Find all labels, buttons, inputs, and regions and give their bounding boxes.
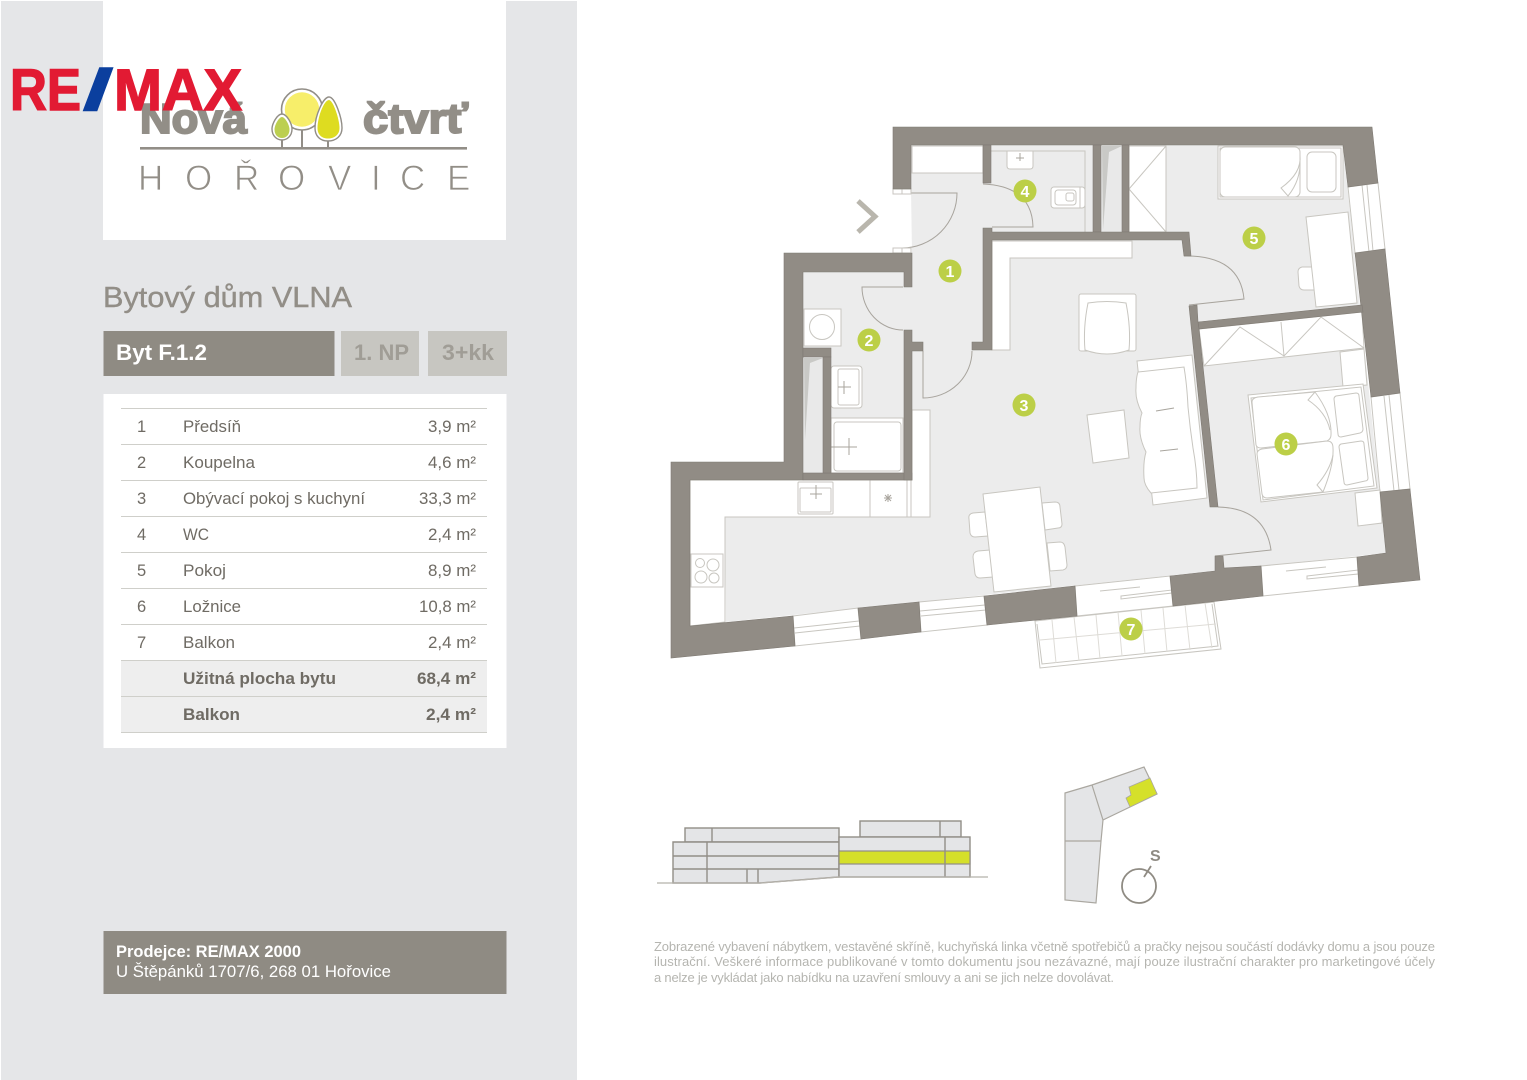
heading: building name: Bytový dům VLNA	[103, 282, 353, 314]
marker 4	[1014, 180, 1036, 202]
armchair	[1079, 294, 1136, 354]
row 4: WC	[183, 526, 209, 544]
building elevation	[657, 821, 988, 883]
marker 1: 1	[946, 264, 955, 281]
living room furniture	[969, 294, 1207, 592]
row: usable area total: Užitná plocha bytu	[183, 670, 336, 688]
icon: washbasin	[831, 366, 862, 408]
badge: floor: 1. NP	[354, 340, 409, 365]
room markers	[858, 180, 1298, 640]
badge: unit name	[104, 331, 334, 376]
dining table	[983, 487, 1051, 592]
badge: unit name: Byt F.1.2	[116, 340, 207, 365]
RE/MAX logo	[10, 58, 242, 123]
shafts	[803, 145, 1122, 473]
row 1: 3,9 m²	[428, 418, 477, 436]
row 5	[137, 562, 477, 580]
kitchen fixtures	[691, 482, 892, 587]
arrow: entrance	[858, 201, 875, 232]
highlighted unit	[1126, 778, 1157, 807]
icon: compass: S	[1150, 848, 1161, 865]
row 7: 2,4 m²	[428, 634, 477, 652]
floor plan	[671, 127, 1420, 668]
row 3: 33,3 m²	[419, 490, 477, 508]
badge: floor	[341, 331, 419, 376]
row 7: Balkon	[183, 634, 235, 652]
row: balcony total: 2,4 m²	[426, 706, 477, 724]
RE/MAX logo: MAX	[114, 58, 242, 123]
marker 6: 6	[1282, 437, 1291, 454]
row 7: 7	[137, 634, 146, 652]
row 1: 1	[137, 418, 146, 436]
desk chair	[1298, 267, 1315, 290]
row 5: 5	[137, 562, 146, 580]
marker 7: 7	[1127, 622, 1136, 639]
row 2: 4,6 m²	[428, 454, 477, 472]
highlighted floor	[839, 851, 970, 864]
marker 3	[1012, 394, 1036, 416]
panel: seller contact: Prodejce: RE/MAX 2000	[116, 943, 301, 961]
icon: bathtub	[831, 418, 903, 473]
balcony	[1035, 602, 1221, 668]
marker 7	[1120, 618, 1142, 640]
logo wordmark: Hořovice: HOŘOVICE	[138, 159, 470, 198]
marker 5	[1242, 226, 1266, 250]
sofa	[1136, 355, 1207, 505]
row 4: 4	[137, 526, 146, 544]
row 2: Koupelna	[183, 454, 256, 472]
badge: layout	[428, 331, 507, 376]
row 3: 3	[137, 490, 146, 508]
logo wordmark: čtvrť: čtvrť	[363, 95, 469, 142]
row 3	[137, 490, 477, 508]
panel: seller contact	[104, 931, 506, 994]
bedroom 6 furniture	[1248, 384, 1382, 526]
bathroom fixtures	[804, 309, 903, 473]
row: balcony total: Balkon	[183, 706, 240, 724]
doors	[862, 184, 1271, 556]
row 6: 6	[137, 598, 146, 616]
icon: hob	[691, 554, 723, 587]
icon: toilet	[1051, 187, 1085, 208]
bedroom 5 furniture	[1218, 146, 1357, 307]
row 4	[137, 526, 477, 544]
panel: project logo	[103, 0, 506, 240]
room floors	[725, 145, 1386, 622]
RE/MAX logo: /	[82, 58, 114, 123]
coffee table	[1087, 410, 1129, 463]
row 1: Předsíň	[183, 418, 241, 436]
badge: layout: 3+kk	[442, 340, 495, 365]
site plan	[1065, 767, 1161, 903]
marker 2	[858, 328, 880, 352]
marker 2: 2	[865, 333, 874, 350]
disclaimer	[654, 939, 1436, 985]
dining chairs	[969, 502, 1067, 578]
row 6: 10,8 m²	[419, 598, 477, 616]
row: usable area total: 68,4 m²	[417, 670, 477, 688]
icon: kitchen sink	[798, 482, 833, 514]
walls	[671, 127, 1420, 658]
panel: left sidebar	[1, 0, 577, 1080]
windows and balcony door	[793, 183, 1410, 646]
marker 6	[1274, 432, 1298, 456]
disclaimer: Zobrazené vybavení nábytkem, vestavěné skříně, kuchyňská linka včetně spotřebičů a pračky nejsou součástí dodávky domu a jsou pouze	[654, 939, 1435, 954]
double bed	[1248, 384, 1377, 502]
marker 3: 3	[1020, 398, 1029, 415]
row: balcony total	[183, 706, 477, 724]
table: room areas	[104, 394, 506, 748]
icon: extractor	[884, 494, 892, 502]
logo rule	[140, 147, 467, 150]
row 3: Obývací pokoj s kuchyní	[183, 490, 365, 508]
row 5: 8,9 m²	[428, 562, 477, 580]
row: usable area total	[183, 670, 477, 688]
RE/MAX logo: RE	[10, 58, 81, 123]
marker 4: 4	[1021, 184, 1030, 201]
row 7	[137, 634, 477, 652]
icon: three trees	[272, 89, 342, 148]
desk	[1306, 212, 1357, 307]
single bed	[1218, 146, 1343, 199]
row 4: 2,4 m²	[428, 526, 477, 544]
panel: seller contact: U Štěpánků 1707/6, 268 01 Hořovice	[116, 962, 391, 981]
row 6	[137, 598, 477, 616]
disclaimer: a nelze je vykládat jako nabídku na uzavření smlouvy a ani se jich nelze dovolávat.	[654, 970, 1114, 985]
marker 5: 5	[1250, 231, 1259, 248]
row 5: Pokoj	[183, 562, 226, 580]
logo wordmark: Nová: Nová	[140, 95, 248, 142]
icon: WC sink	[1007, 151, 1033, 169]
icon: washing machine	[804, 309, 841, 346]
row 1	[137, 418, 477, 436]
disclaimer: ilustrační. Veškeré informace publikované v tomto dokumentu jsou nezávazné, mají pouze ilustrační charakter pro marketingové účely	[654, 954, 1436, 969]
marker 1	[938, 260, 962, 282]
row 2	[137, 454, 477, 472]
built-in storage	[690, 146, 1367, 626]
row 6: Ložnice	[183, 598, 241, 616]
WC fixtures	[991, 151, 1085, 232]
nightstand	[1355, 490, 1382, 526]
row 2: 2	[137, 454, 146, 472]
